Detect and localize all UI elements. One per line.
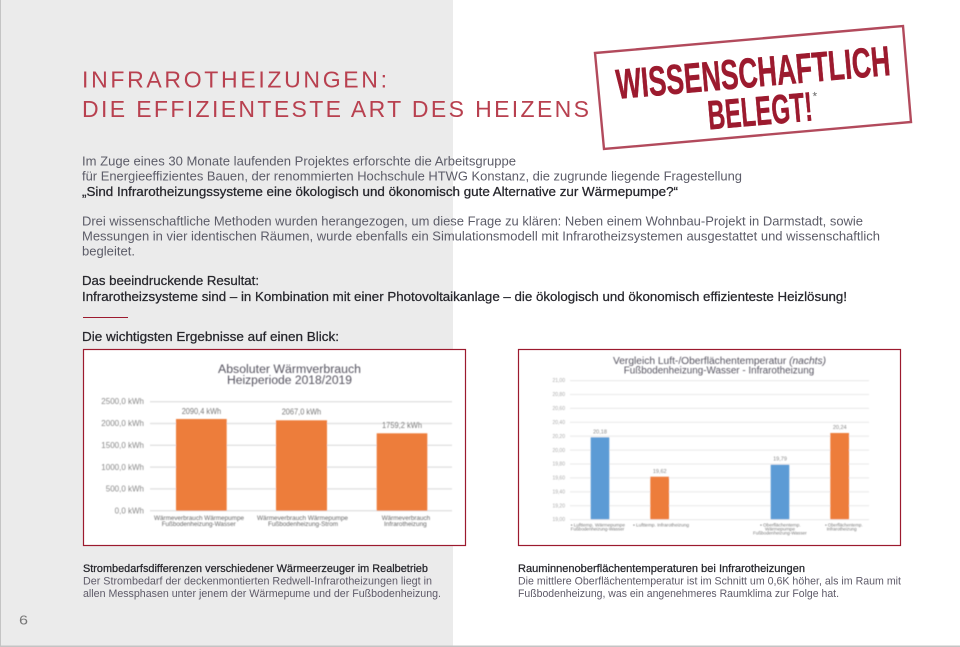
bar value labels bbox=[182, 407, 422, 430]
y axis labels: 20,20 bbox=[552, 434, 565, 440]
page number: 6 bbox=[19, 612, 28, 628]
intro paragraph: Im Zuge eines 30 Monate laufenden Projektes erforschte die Arbeitsgruppe bbox=[82, 154, 516, 168]
chart panel: air and surface temperature bbox=[518, 350, 900, 546]
category labels bbox=[154, 515, 431, 528]
category labels: Wärmeverbrauch Wärmepumpe bbox=[257, 515, 348, 522]
category labels: Infrarotheizung bbox=[827, 527, 857, 532]
methods paragraph: Messungen in vier identischen Räumen, wurde ebenfalls ein Simulationsmodell mit Infrarotheizsystemen ausgestattet und wissenschaftlich bbox=[82, 228, 880, 244]
stamp: wissenschaftlich belegt: BELEGT! bbox=[706, 84, 814, 138]
chart title bbox=[218, 364, 361, 387]
bar value labels: 19,79 bbox=[773, 457, 787, 463]
y axis labels: 19,60 bbox=[552, 476, 565, 482]
y axis labels: 20,40 bbox=[552, 420, 565, 426]
left chart caption: Der Strombedarf der deckenmontierten Redwell-Infrarotheizungen liegt in bbox=[83, 576, 432, 588]
bars bbox=[176, 419, 427, 511]
y axis labels: 19,00 bbox=[552, 517, 565, 523]
category labels: Infrarotheizung bbox=[384, 521, 427, 528]
category labels: Wärmepumpe bbox=[765, 527, 796, 532]
y axis labels: 20,80 bbox=[552, 392, 565, 398]
y axis labels: 2000,0 kWh bbox=[101, 419, 144, 428]
chart title: Heizperiode 2018/2019 bbox=[227, 375, 352, 387]
grey left background panel bbox=[0, 0, 453, 646]
y axis labels: 1500,0 kWh bbox=[101, 441, 144, 450]
y axis labels: 21,00 bbox=[552, 378, 565, 384]
chart title: Vergleich Luft-/Oberflächentemperatur (nachts) bbox=[613, 356, 826, 367]
title: DIE EFFIZIENTESTE ART DES HEIZENS bbox=[82, 96, 589, 122]
stamp: wissenschaftlich belegt: * bbox=[812, 89, 818, 103]
title: INFRAROTHEIZUNGEN: bbox=[82, 66, 387, 92]
stamp: wissenschaftlich belegt bbox=[595, 26, 911, 149]
result statement: Das beeindruckende Resultat: bbox=[82, 273, 259, 288]
chart title bbox=[613, 356, 826, 376]
result statement: Infrarotheizsysteme sind – in Kombination mit einer Photovoltaikanlage – die ökologisch und ökonomisch effizienteste Heizlösung! bbox=[82, 289, 847, 304]
chart title: Absoluter Wärmverbrauch bbox=[218, 364, 361, 376]
category labels: Fußbodenheizung-Wasser bbox=[162, 521, 237, 528]
chart panel: absolute heat consumption bbox=[84, 350, 466, 546]
left chart caption: allen Messphasen unter jenem der Wärmepume und der Fußbodenheizung. bbox=[83, 588, 441, 600]
methods paragraph: Drei wissenschaftliche Methoden wurden herangezogen, um diese Frage zu klären: Neben einem Wohnbau-Projekt in Darmstadt, sowie bbox=[82, 214, 863, 228]
y axis labels: 500,0 kWh bbox=[106, 484, 144, 494]
intro paragraph bbox=[82, 154, 742, 199]
category labels: ▪ Lufttemp. Infrarotheizung bbox=[633, 522, 690, 527]
category labels: Fußbodenheizung-Strom bbox=[268, 521, 338, 528]
category labels: Wärmeverbrauch Wärmepumpe bbox=[154, 515, 244, 522]
bar value labels: 1759,2 kWh bbox=[382, 421, 422, 430]
intro paragraph: für Energieeffizientes Bauen, der renommierten Hochschule HTWG Konstanz, die zugrunde liegende Fragestellung bbox=[82, 168, 742, 184]
left chart caption: Strombedarfsdifferenzen verschiedener Wärmeerzeuger im Realbetrieb bbox=[83, 563, 428, 575]
y axis labels: 19,20 bbox=[552, 504, 565, 510]
category labels: Fußbodenheizung-Wasser bbox=[571, 527, 625, 532]
y axis labels: 20,00 bbox=[552, 448, 565, 454]
bars bbox=[591, 433, 849, 519]
category labels: Fußbodenheizung-Wasser bbox=[753, 531, 807, 536]
category labels: ▪ Oberflächentemp. bbox=[760, 522, 801, 527]
category labels: Wärmeverbrauch bbox=[382, 515, 431, 522]
right chart caption: Rauminnenoberflächentemperaturen bei Infrarotheizungen bbox=[518, 563, 805, 575]
category labels: ▪ Lufttemp. Wärmepumpe bbox=[571, 522, 626, 527]
y axis labels: 0,0 kWh bbox=[115, 506, 144, 516]
y axis labels: 2500,0 kWh bbox=[101, 397, 144, 406]
left chart caption bbox=[83, 563, 441, 600]
y axis labels bbox=[552, 378, 565, 523]
bar value labels: 19,62 bbox=[653, 469, 667, 475]
bar value labels: 20,24 bbox=[833, 425, 847, 431]
title bbox=[82, 66, 589, 122]
bar value labels: 2067,0 kWh bbox=[282, 408, 321, 416]
bar value labels: 2090,4 kWh bbox=[182, 407, 221, 416]
category labels bbox=[571, 522, 863, 536]
right chart caption bbox=[518, 563, 901, 600]
y axis labels: 1000,0 kWh bbox=[101, 463, 144, 472]
chart title: Fußbodenheizung-Wasser - Infrarotheizung bbox=[624, 366, 814, 376]
section heading: Die wichtigsten Ergebnisse auf einen Blick: bbox=[82, 329, 339, 344]
methods paragraph bbox=[82, 214, 880, 258]
bar value labels: 20,18 bbox=[593, 430, 607, 436]
result statement bbox=[82, 273, 847, 304]
methods paragraph: begleitet. bbox=[82, 244, 135, 258]
bar value labels bbox=[593, 425, 847, 475]
right chart caption: Fußbodenheizung, was ein angenehmeres Raumklima zur Folge hat. bbox=[518, 588, 839, 600]
intro paragraph: „Sind Infrarotheizungssysteme eine ökologisch und ökonomisch gute Alternative zur Wärmepumpe?“ bbox=[82, 184, 678, 199]
y axis labels: 20,60 bbox=[552, 406, 565, 412]
y axis labels bbox=[101, 397, 144, 516]
y axis labels: 19,80 bbox=[552, 462, 565, 468]
right chart caption: Die mittlere Oberflächentemperatur ist im Schnitt um 0,6K höher, als im Raum mit bbox=[518, 576, 901, 588]
category labels: ▪ Oberflächentemp. bbox=[825, 522, 863, 527]
y axis labels: 19,40 bbox=[552, 490, 565, 496]
